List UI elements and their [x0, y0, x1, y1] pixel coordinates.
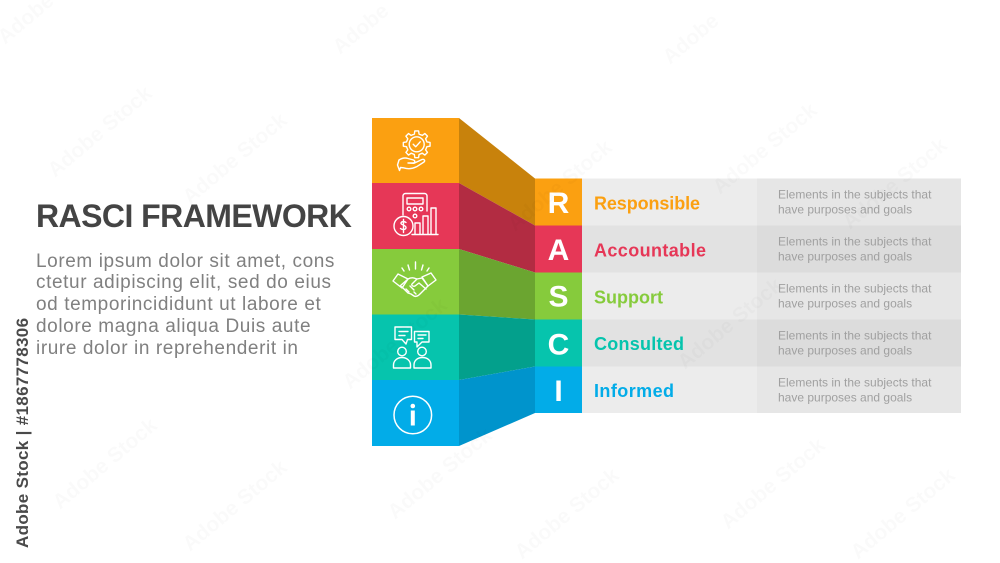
watermarks: Adobe: [658, 9, 723, 69]
perspective side bands: [459, 118, 535, 446]
row descriptions: have purposes and goals: [778, 390, 912, 404]
letters: S: [548, 280, 569, 314]
row descriptions: have purposes and goals: [778, 250, 912, 264]
icon: information: [394, 396, 432, 434]
row labels: Support: [594, 288, 663, 308]
letters: I: [554, 375, 563, 408]
row descriptions: Elements in the subjects that: [778, 234, 932, 248]
row labels: Responsible: [594, 194, 700, 214]
stock id vertical caption: Adobe Stock | #1867778306: [13, 318, 32, 548]
watermarks: Adobe Stock: [48, 414, 162, 514]
icon: two people talking: [394, 327, 431, 368]
row descriptions: have purposes and goals: [778, 344, 912, 358]
letters: R: [548, 187, 570, 220]
watermarks: Adobe Stock: [178, 109, 292, 209]
row descriptions: [778, 188, 932, 404]
watermarks: Adobe Stock: [846, 464, 960, 563]
watermarks: Adobe Stock: [673, 274, 787, 374]
watermarks: Adobe: [328, 0, 393, 59]
body paragraph: dolore magna aliqua Duis aute: [36, 316, 311, 337]
row labels: Accountable: [594, 240, 706, 260]
row descriptions: Elements in the subjects that: [778, 282, 932, 296]
icon: gear in hand: [398, 131, 430, 170]
watermarks: Adobe Stock: [383, 424, 497, 524]
table rows: [582, 178, 961, 413]
icon: calculator and bars: [394, 194, 438, 236]
watermarks: Adobe Stock: [178, 456, 292, 556]
letters: A: [548, 234, 569, 267]
row descriptions: Elements in the subjects that: [778, 376, 932, 390]
body paragraph: irure dolor in reprehenderit in: [36, 338, 299, 359]
title: RASCI FRAMEWORK: [36, 198, 351, 234]
letters: [548, 187, 570, 408]
watermarks: Adobe Stock: [510, 464, 624, 563]
body paragraph: [36, 250, 335, 359]
watermarks: Adobe Stock: [838, 134, 952, 234]
watermarks: Adobe Stock: [708, 99, 822, 199]
watermarks: Adobe Stock: [503, 136, 617, 236]
body paragraph: od temporincididunt ut labore et: [36, 294, 321, 315]
row labels: Informed: [594, 381, 674, 401]
body paragraph: ctetur adipiscing elit, sed do eius: [36, 272, 332, 293]
watermarks: Adobe Stock: [716, 434, 830, 534]
row descriptions: have purposes and goals: [778, 202, 912, 216]
row descriptions: Elements in the subjects that: [778, 328, 932, 342]
row labels: [594, 194, 706, 401]
row descriptions: have purposes and goals: [778, 296, 912, 310]
watermarks: Adobe Stock: [43, 82, 157, 182]
icon: handshake: [393, 262, 436, 296]
letters: C: [548, 328, 569, 362]
row descriptions: Elements in the subjects that: [778, 188, 932, 202]
letter blocks: [535, 178, 582, 413]
left colour column: [372, 118, 459, 446]
watermarks: Adobe Stock: [338, 294, 452, 394]
body paragraph: Lorem ipsum dolor sit amet, cons: [36, 250, 335, 272]
row labels: Consulted: [594, 334, 684, 354]
